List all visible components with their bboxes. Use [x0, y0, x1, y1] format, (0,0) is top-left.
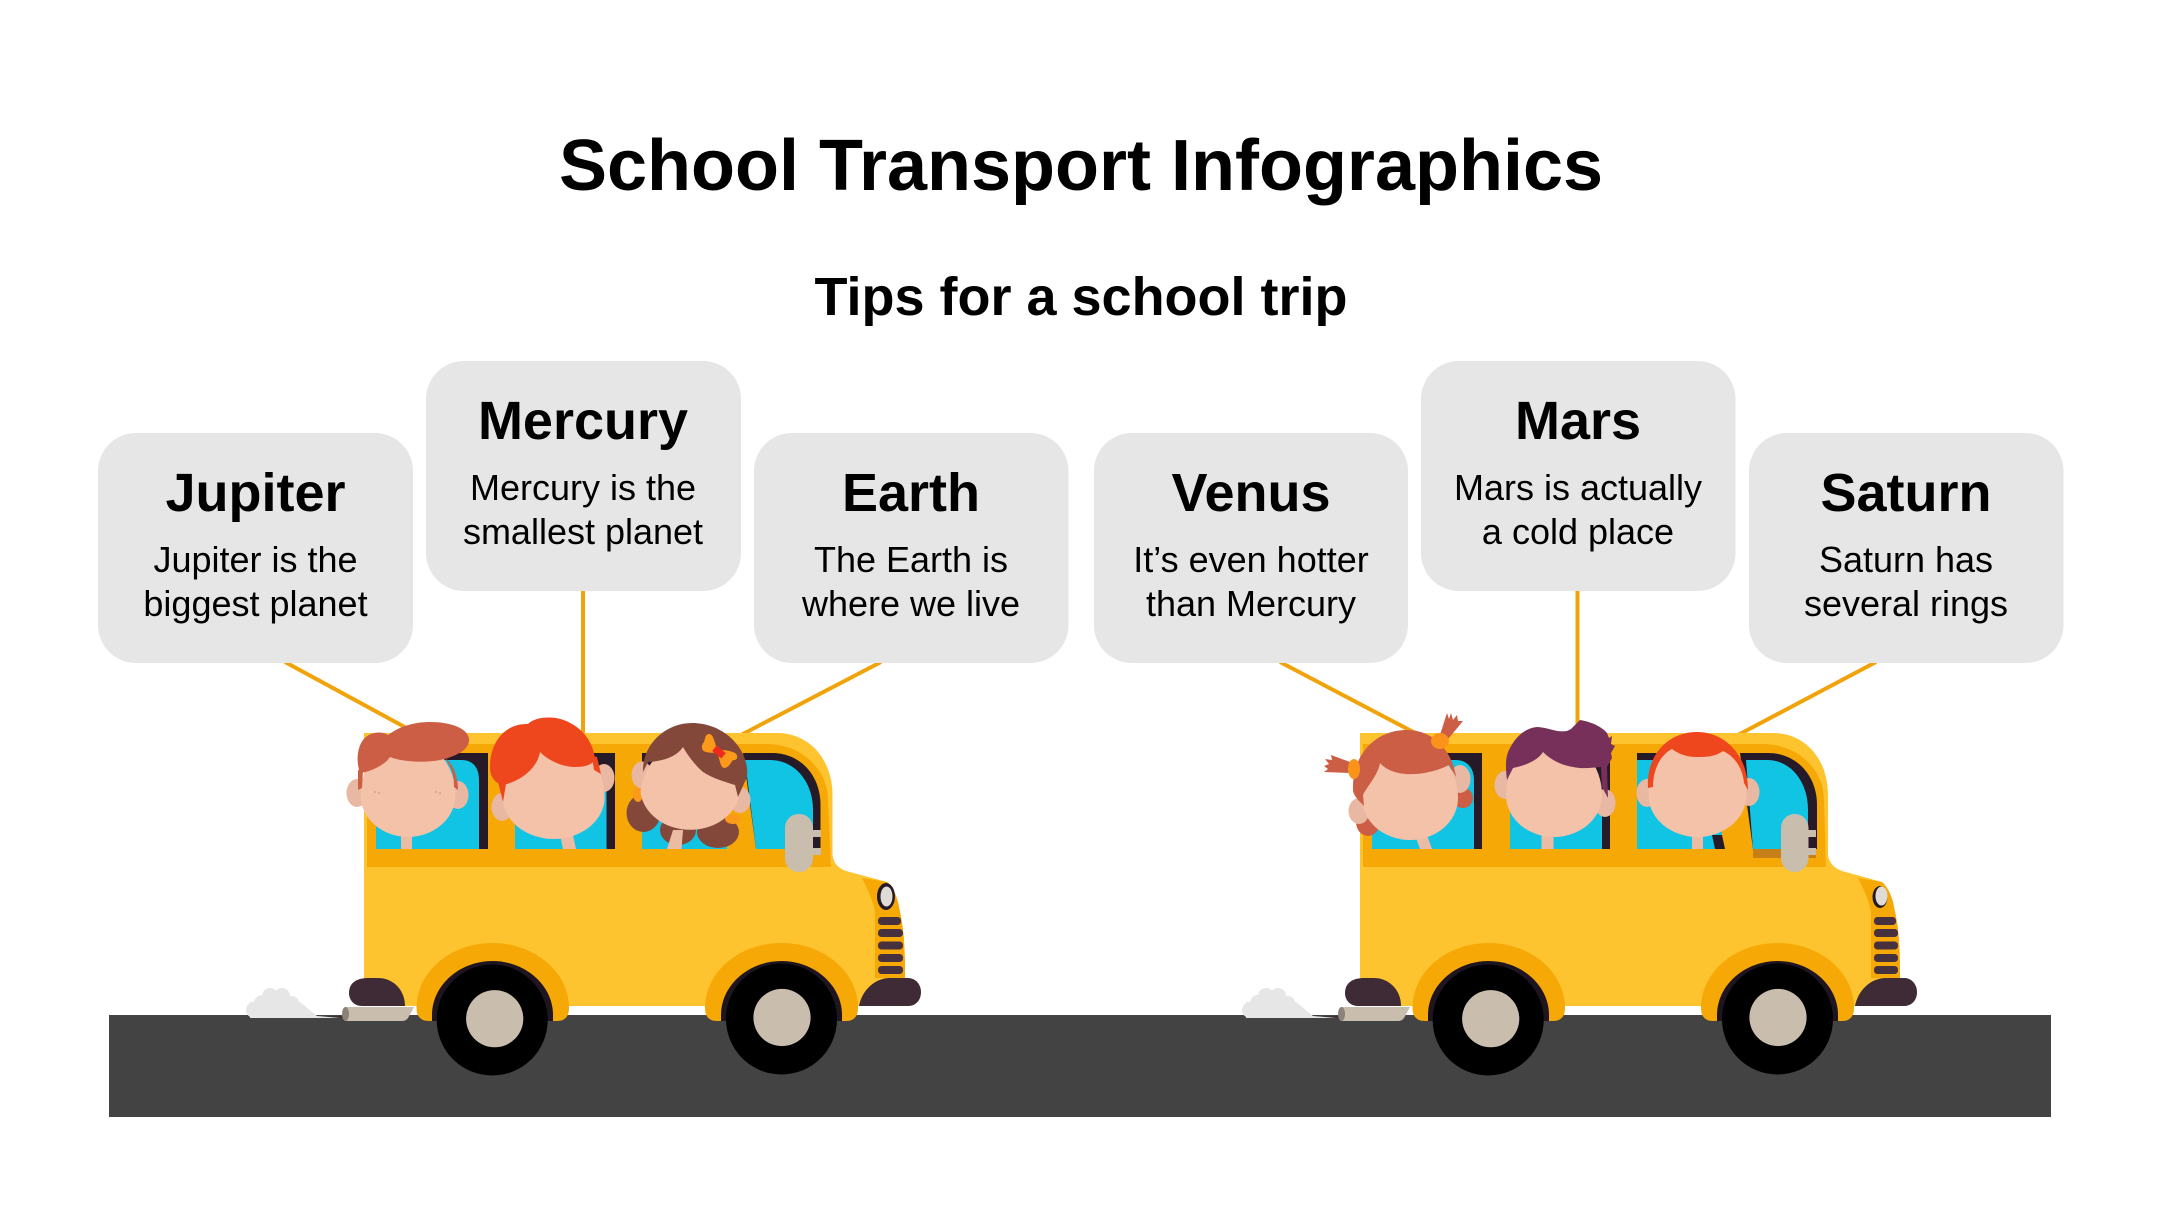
child: boy with brown-red hair — [346, 722, 469, 849]
callout: Earth — [754, 433, 1068, 663]
rear bumper — [1345, 978, 1401, 1006]
front hood band — [862, 878, 905, 978]
callout: Mars — [1421, 361, 1736, 591]
windows — [1372, 753, 1817, 858]
connector line: Earth — [741, 662, 881, 735]
callout: Mercury — [426, 361, 741, 591]
callout: Mercury: Mercury — [478, 391, 688, 451]
bus: right — [1242, 733, 1917, 1076]
mirror — [1781, 814, 1816, 872]
subtitle: Tips for a school trip — [814, 267, 1348, 327]
rear bumper — [349, 978, 405, 1006]
headlight — [1872, 886, 1888, 908]
child: girl with pigtails — [1324, 713, 1473, 849]
grille — [878, 917, 903, 974]
connector line: Mars — [1576, 590, 1580, 728]
road — [109, 1015, 2051, 1117]
callout: Earth: where we live — [801, 583, 1020, 624]
connector line: Venus — [1280, 662, 1419, 735]
window band — [367, 744, 831, 867]
front bumper — [859, 978, 921, 1006]
callout: Saturn — [1749, 433, 2064, 663]
callout: Saturn: Saturn has — [1819, 539, 1993, 580]
front wheel — [705, 943, 858, 1074]
connector line: Mercury — [581, 590, 585, 740]
windows — [376, 753, 820, 849]
child: boy with purple hair — [1494, 720, 1616, 849]
callout: Venus: than Mercury — [1146, 583, 1356, 624]
front hood band — [1858, 878, 1900, 978]
headlight — [877, 883, 895, 910]
bow — [702, 734, 737, 768]
callout: Mars: Mars — [1515, 391, 1641, 451]
callout: Jupiter: biggest planet — [143, 583, 368, 624]
bus: left — [246, 733, 921, 1076]
exhaust pipe — [1320, 1007, 1410, 1021]
callout: Mercury: smallest planet — [463, 511, 703, 552]
rear wheel — [416, 943, 569, 1076]
callout: Jupiter: Jupiter is the — [153, 539, 358, 580]
callout: Mars: a cold place — [1482, 511, 1674, 552]
callout: Mercury: Mercury is the — [470, 467, 696, 508]
callout: Earth: Earth — [842, 463, 980, 523]
callout: Jupiter — [98, 433, 413, 663]
child: girl with brown hair and bow — [626, 723, 750, 849]
callout: Venus — [1094, 433, 1408, 663]
bus body — [1360, 733, 1900, 1006]
child: boy with red hair — [490, 718, 614, 849]
smoke — [246, 988, 340, 1018]
grille — [1874, 917, 1898, 974]
rear wheel — [1412, 943, 1565, 1076]
front bumper — [1855, 978, 1917, 1006]
connector line: Saturn — [1738, 662, 1876, 735]
connector line: Jupiter — [285, 662, 412, 731]
bus body — [364, 733, 905, 1006]
callout: Mars: Mars is actually — [1454, 467, 1702, 508]
front wheel — [1701, 943, 1854, 1074]
callout: Saturn: several rings — [1804, 583, 2008, 624]
window band — [1363, 744, 1826, 867]
callout: Venus: Venus — [1171, 463, 1331, 523]
title: School Transport Infographics — [559, 126, 1603, 206]
callout: Saturn: Saturn — [1820, 463, 1992, 523]
callout: Jupiter: Jupiter — [165, 463, 346, 523]
callout: Venus: It’s even hotter — [1133, 539, 1369, 580]
callout: Earth: The Earth is — [814, 539, 1008, 580]
mirror — [785, 814, 821, 872]
smoke — [1242, 988, 1336, 1018]
child: boy with red cap of hair — [1636, 732, 1760, 849]
exhaust pipe — [324, 1007, 414, 1021]
